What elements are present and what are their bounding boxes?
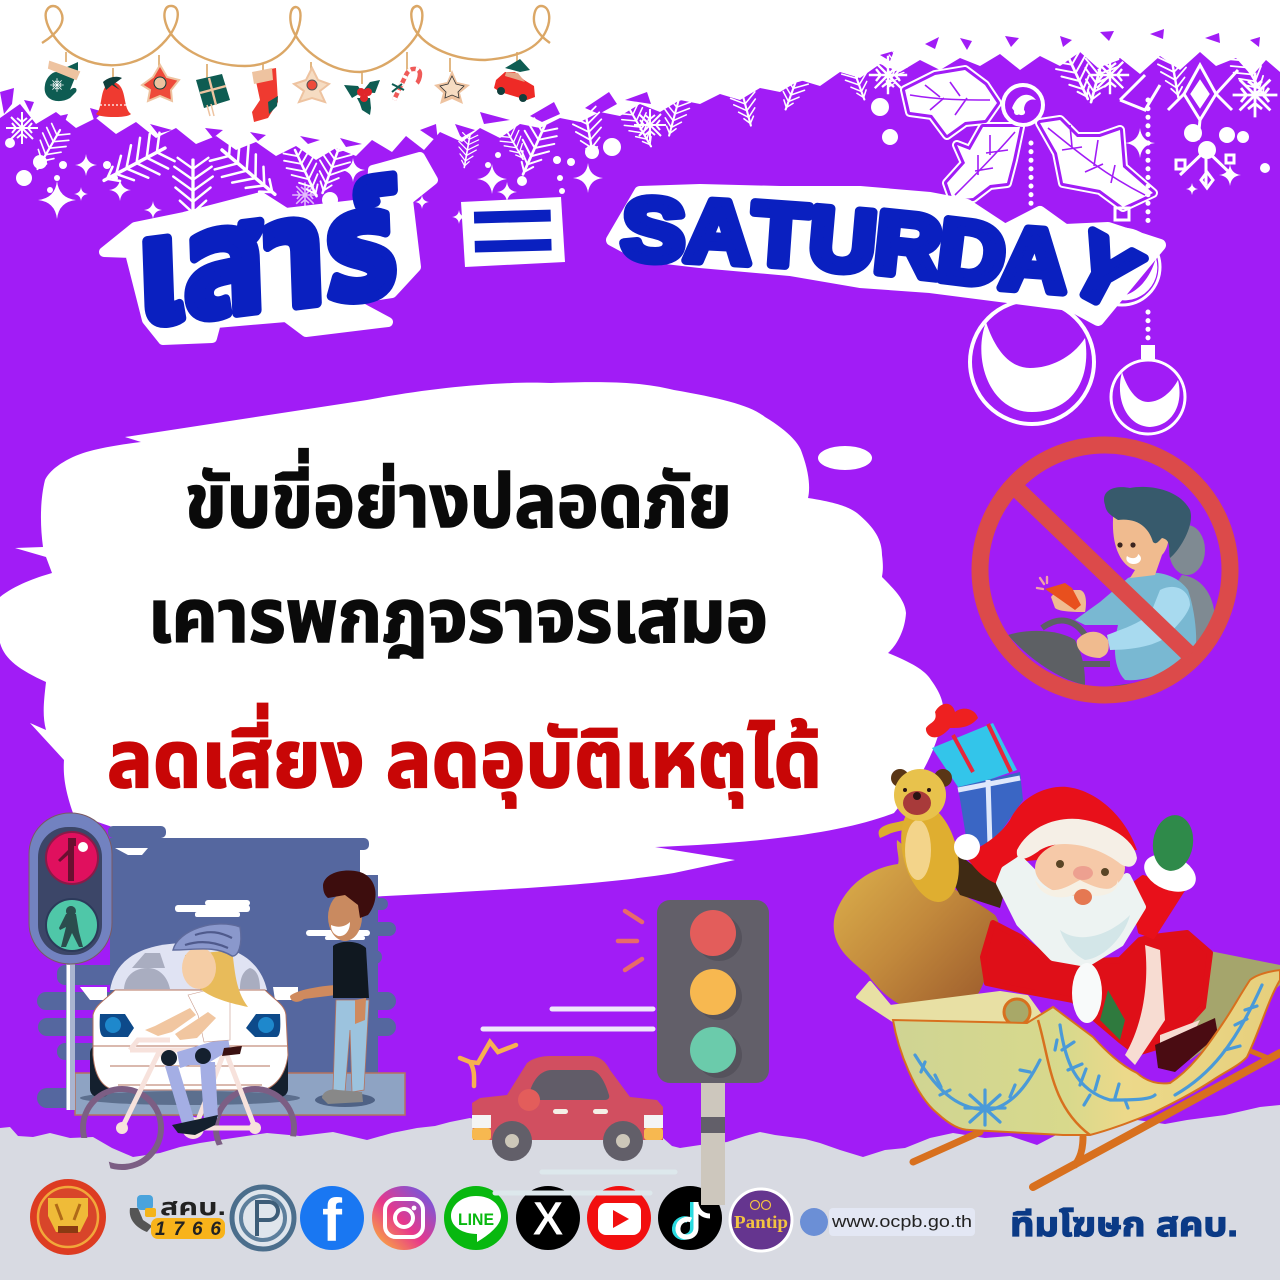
text line 2: เคารพกฎจราจรเสมอ [148,574,768,658]
sleigh runners [913,1050,1280,1187]
snow border: bottom [0,1105,1280,1280]
sleigh body [893,970,1280,1135]
santa tassel [1072,963,1102,1023]
SATURDAY with white backing: T [748,184,812,286]
small bauble [1111,345,1185,434]
sleigh floral pattern [915,985,1262,1125]
title: เสาร์ = SATURDAY [104,157,1160,357]
logo: hotline 1766: สคบ. [160,1194,226,1221]
team name: ทีมโฆษก สคบ. [1010,1206,1238,1244]
icon: candy cane [392,69,420,100]
driver hand [1077,632,1109,658]
white car [80,943,298,1097]
cyclist shoes [172,1115,218,1135]
icon: line: LINE [458,1210,494,1229]
icon: X [516,1186,580,1250]
sleigh back panel [1180,950,1280,1060]
cyclist torso [188,990,230,1042]
bubble accent blob [818,446,872,470]
bike frame [122,1040,255,1128]
cyclist face [182,947,216,989]
santa hat [954,787,1137,885]
cyclist helmet [173,924,241,956]
bead chains [1031,100,1148,345]
SATURDAY with white backing: S [619,180,688,281]
pedestrian signal [29,813,112,964]
icon: star cookie [142,65,179,101]
santa hat band [1017,819,1137,867]
big bauble [970,300,1094,424]
pedestrian signal pole [66,960,75,1110]
clouds [115,848,370,940]
pavement [75,1073,405,1115]
red car [472,1056,663,1161]
icon: instagram [372,1186,436,1250]
santa face [1035,840,1125,896]
prohibition ring [980,445,1230,695]
SATURDAY with white backing: D [933,201,1011,306]
title word Thai with white backing: เสาร์ [133,157,399,357]
icon: youtube [587,1186,651,1250]
driver shirt [1075,573,1196,680]
icon: line [444,1186,508,1250]
santa coat trim [1125,945,1165,1065]
cyclist arms [145,1008,196,1036]
snow over bike wheels [78,1134,300,1175]
SATURDAY with white backing: Y [1054,214,1154,330]
logo: hotline 1766 [130,1194,226,1240]
logo: hotline 1766: 1766 [155,1219,221,1240]
santa raised arm [1130,877,1183,937]
icon: pantip [730,1189,792,1251]
driver hair [1104,487,1191,558]
icon: gift [196,74,230,116]
cyclist with bike [78,924,300,1175]
steering wheel and dashboard [1042,621,1110,664]
garland string [42,6,550,72]
teddy bear [879,769,968,908]
icon: facebook [300,1186,364,1254]
icon: bell [96,77,131,117]
icon: pantip: Pantip [734,1212,788,1232]
traffic light pole [701,1083,725,1205]
santa cuff [1139,847,1201,899]
SATURDAY with white backing [612,180,1160,330]
snow border: top [0,0,1280,160]
gifts [926,704,1023,847]
icon: facebook: f [322,1187,343,1254]
SATURDAY with white backing: A [683,181,754,283]
man standing [290,871,376,1104]
text line 3 red: ลดเสี่ยง ลดอุบัติเหตุได้ [107,704,822,808]
cyclist hair [185,950,248,1007]
phone and hand [1051,590,1086,612]
speech bubble panel [0,382,943,897]
holly wreath with bauble ring [905,70,1153,207]
icon: red car with tree [494,59,535,102]
snow decorations: ferns, beads and sparkles [5,42,1277,226]
equals sign: = [466,169,559,292]
icon: stocking [252,68,278,122]
garland with hanging ornaments [42,6,550,122]
bike wheels [83,1089,161,1167]
SATURDAY with white backing: R [870,193,946,298]
logo: seal [30,1179,106,1255]
hanging baubles [970,100,1185,434]
website link [800,1208,975,1236]
sleigh front scroll [858,983,1040,1030]
person shadow [315,1093,375,1107]
snowflake lattice right [1120,65,1238,188]
SATURDAY with white backing: U [805,188,880,292]
santa mitten [1149,812,1197,874]
footer: logos and social icons [30,1179,1238,1255]
santa on sleigh [834,704,1280,1187]
santa body [983,923,1210,1053]
icon: mitten [45,62,79,101]
SATURDAY with white backing: A [997,209,1071,312]
purple flecks in the snow [0,29,1260,147]
scene blue backdrop [37,826,396,1116]
driver head [1113,496,1169,578]
icon: holly [344,80,380,115]
icon: tiktok [658,1186,722,1250]
motion lines [460,911,675,1193]
seat [1165,525,1215,655]
prohibition slash [1018,490,1190,655]
icon: star cookie 3 [434,70,470,104]
traffic light head [657,900,769,1083]
icon: X: X [532,1193,564,1246]
bauble behind Y [1084,208,1160,305]
red car and traffic light [460,900,769,1205]
sack [834,840,999,1016]
santa boot [1155,1018,1218,1072]
no phone while driving icon [980,445,1230,695]
icon: star cookie 2 [294,68,329,102]
text line 1: ขับขี่อย่างปลอดภัย [185,449,732,543]
santa beard [1000,860,1142,963]
cyclist street scene [29,813,405,1175]
logo: OCPB [232,1187,294,1249]
website link: www.ocpb.go.th [831,1212,972,1231]
cyclist legs [165,1066,195,1124]
